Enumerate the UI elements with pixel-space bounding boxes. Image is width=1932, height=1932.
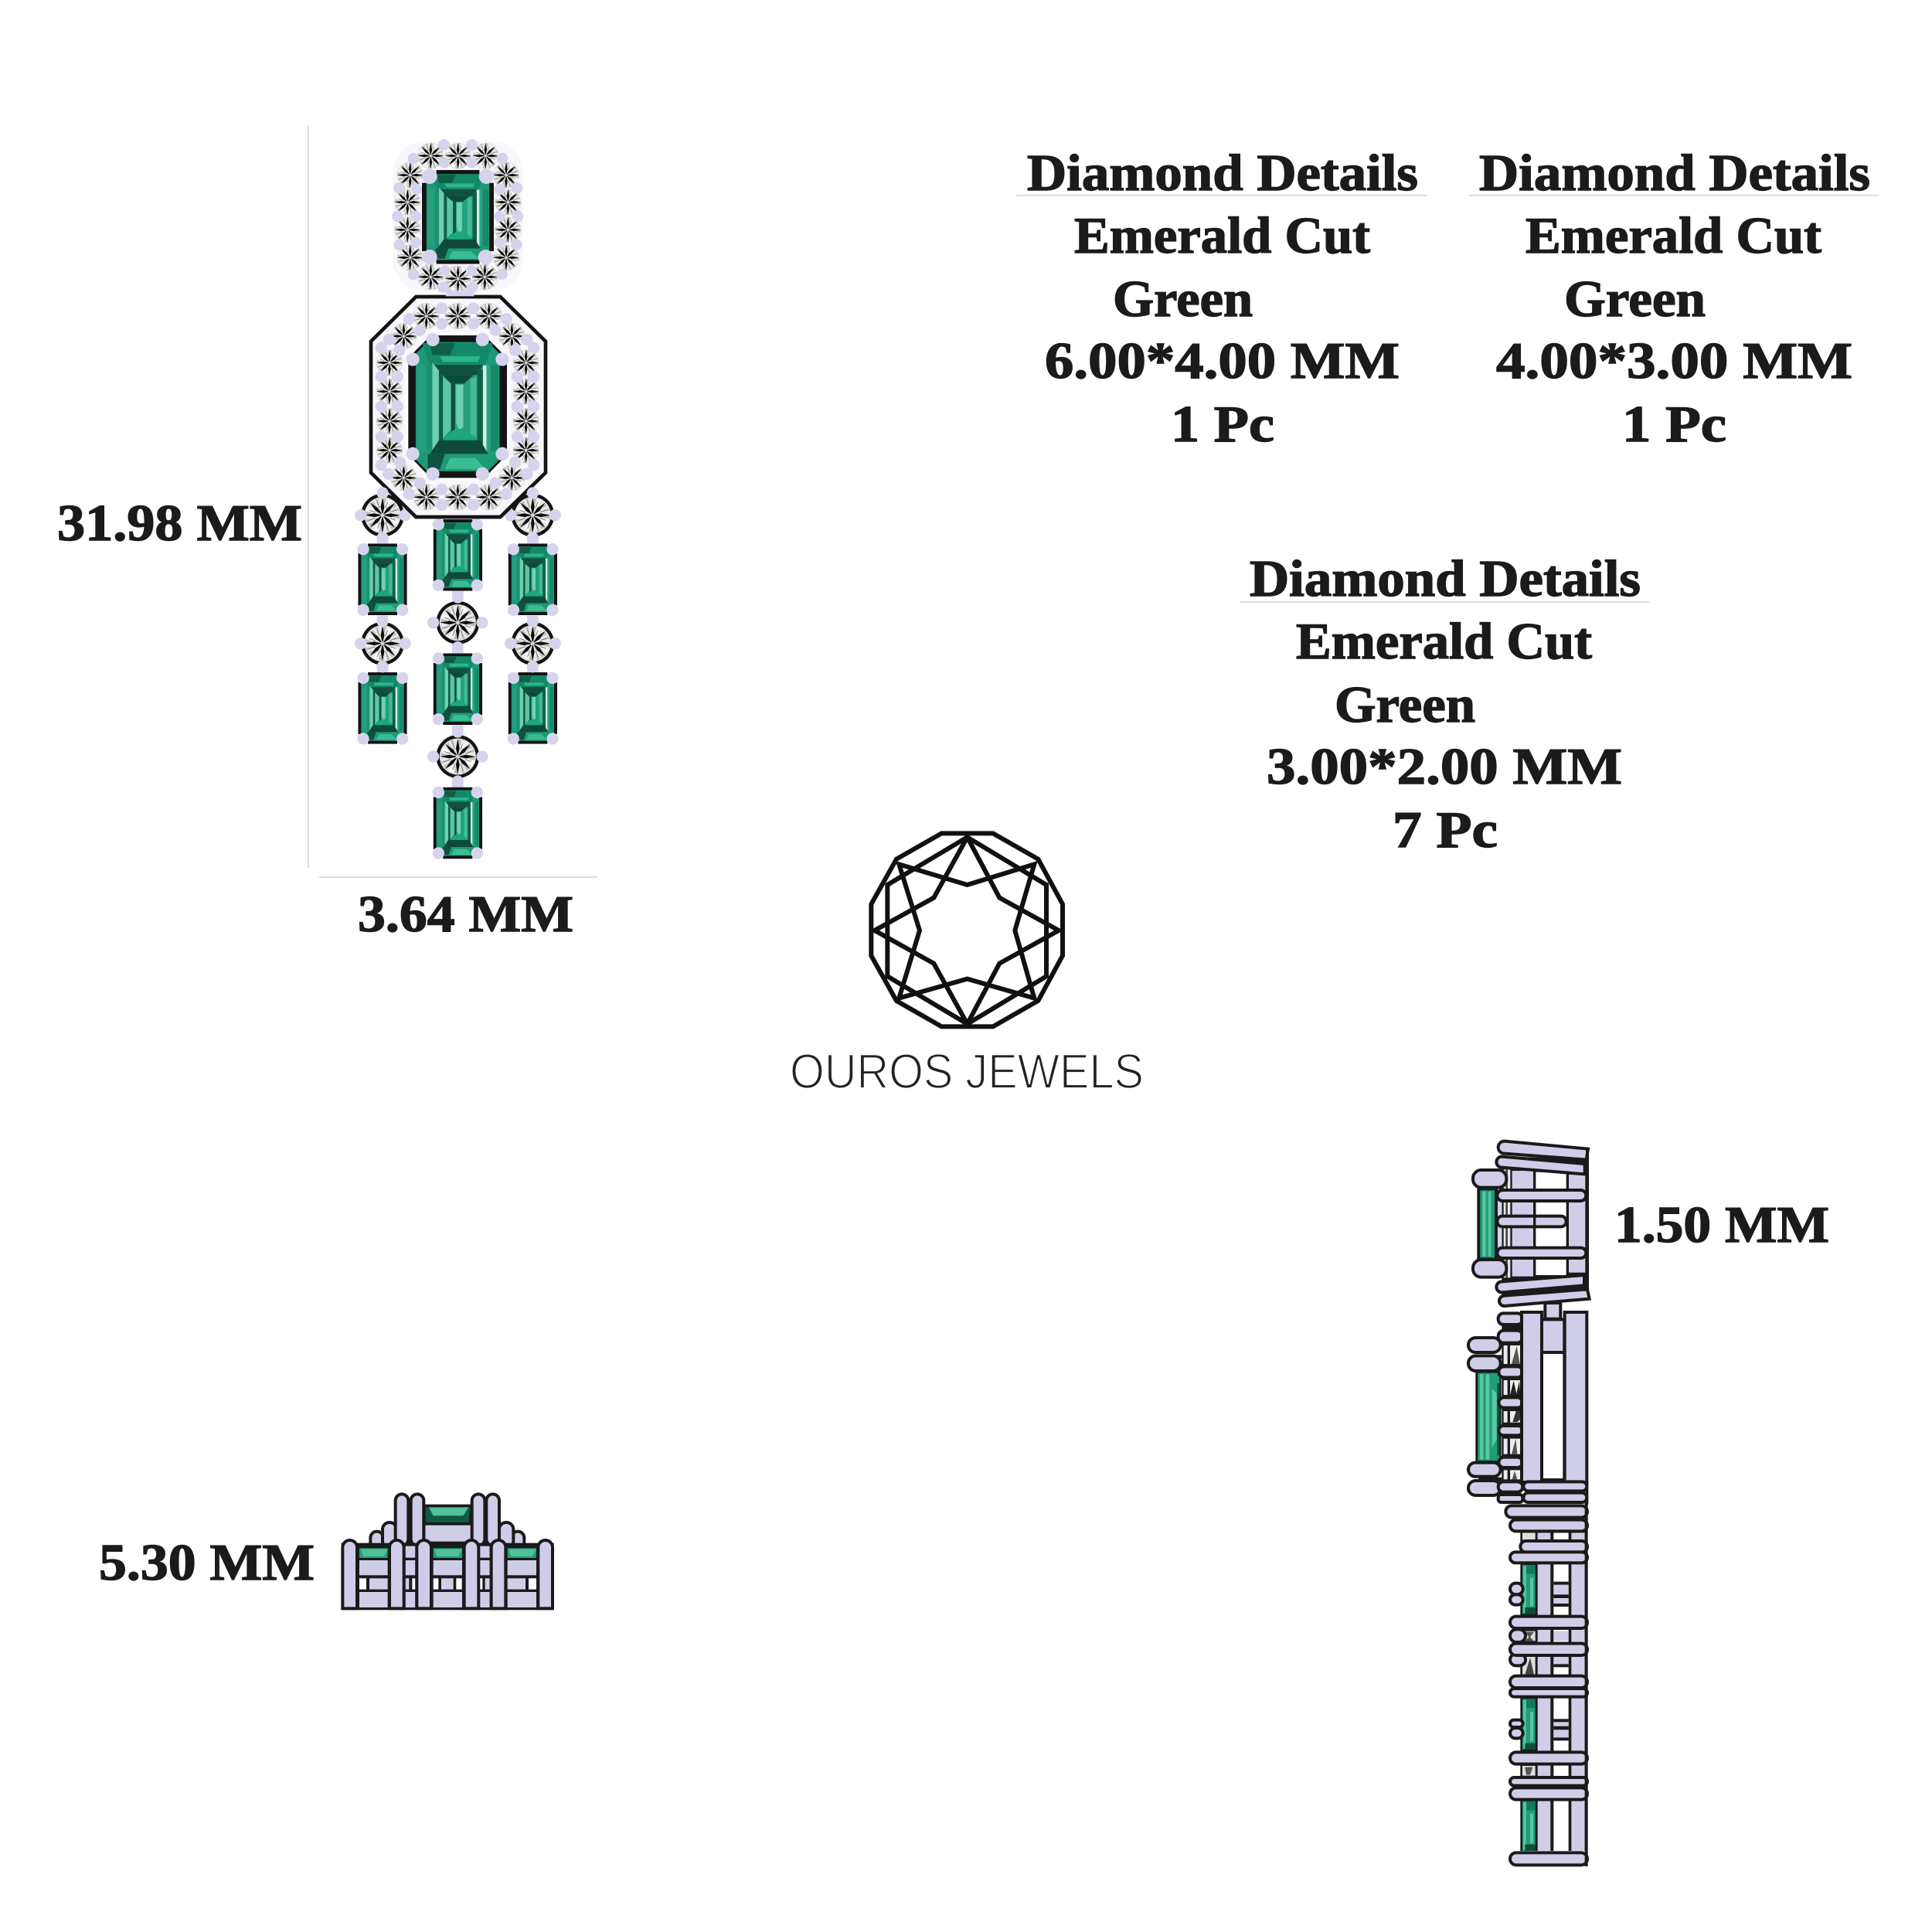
earring front view [308,126,597,878]
top emerald with halo [392,139,523,296]
top setting [1473,1141,1590,1306]
width dimension line [319,876,597,878]
center fringe column [427,519,488,859]
stone details: 4.00*3.00 MM [1469,145,1879,453]
stone details: 3.00*2.00 MM: 3.00*2.00 MM [1267,738,1622,795]
stone details: 6.00*4.00 MM: Emerald Cut [1074,207,1371,264]
stone details: 4.00*3.00 MM: Emerald Cut [1526,207,1822,264]
connector [1545,1303,1560,1319]
middle setting [1468,1312,1588,1505]
stone details: 6.00*4.00 MM: Diamond Details [1027,145,1418,202]
stone details: 6.00*4.00 MM: Green [1113,270,1253,328]
front row prongs [342,1540,553,1608]
stone details: 3.00*2.00 MM: 7 Pc [1393,801,1498,859]
fringe prongs [1505,1499,1588,1866]
fringe of emeralds and round diamonds [355,495,561,859]
left fringe column [355,495,411,745]
stone details: 4.00*3.00 MM: 4.00*3.00 MM [1496,332,1852,389]
label: height 31.98 MM: 31.98 MM [57,495,302,552]
logo: Ouros Jewels [790,833,1144,1099]
front row sections [359,1546,536,1607]
back row prongs and stone [370,1494,524,1549]
large emerald with octagonal halo [371,297,546,517]
icon: brilliant cut diamond [871,833,1063,1026]
stone details: 6.00*4.00 MM [1016,145,1427,453]
side view: top and middle settings [1468,1141,1590,1505]
right fringe column [505,495,561,745]
height dimension line [308,126,309,868]
earring bottom view [342,1494,554,1610]
stone details: 3.00*2.00 MM: Emerald Cut [1296,613,1593,670]
side view: lower fringe [1505,1499,1588,1866]
stone details: 4.00*3.00 MM: Diamond Details [1479,145,1870,202]
stone details: 6.00*4.00 MM: 6.00*4.00 MM [1045,332,1400,389]
front row body [342,1543,554,1610]
stone details: 3.00*2.00 MM: Green [1335,676,1475,733]
label: thickness 1.50 MM: 1.50 MM [1614,1196,1829,1253]
fringe columns [1520,1532,1587,1851]
label: depth 5.30 MM: 5.30 MM [99,1534,315,1591]
stone details: 3.00*2.00 MM: Diamond Details [1250,550,1641,607]
stone details: 4.00*3.00 MM: 1 Pc [1622,396,1726,453]
stone details: 6.00*4.00 MM: 1 Pc [1171,396,1274,453]
earring side view [1468,1141,1590,1866]
stone details: 4.00*3.00 MM: Green [1564,270,1706,328]
label: width 3.64 MM: 3.64 MM [358,886,573,943]
wordmark: OUROS JEWELS [790,1045,1144,1099]
stone details: 3.00*2.00 MM [1240,550,1649,859]
